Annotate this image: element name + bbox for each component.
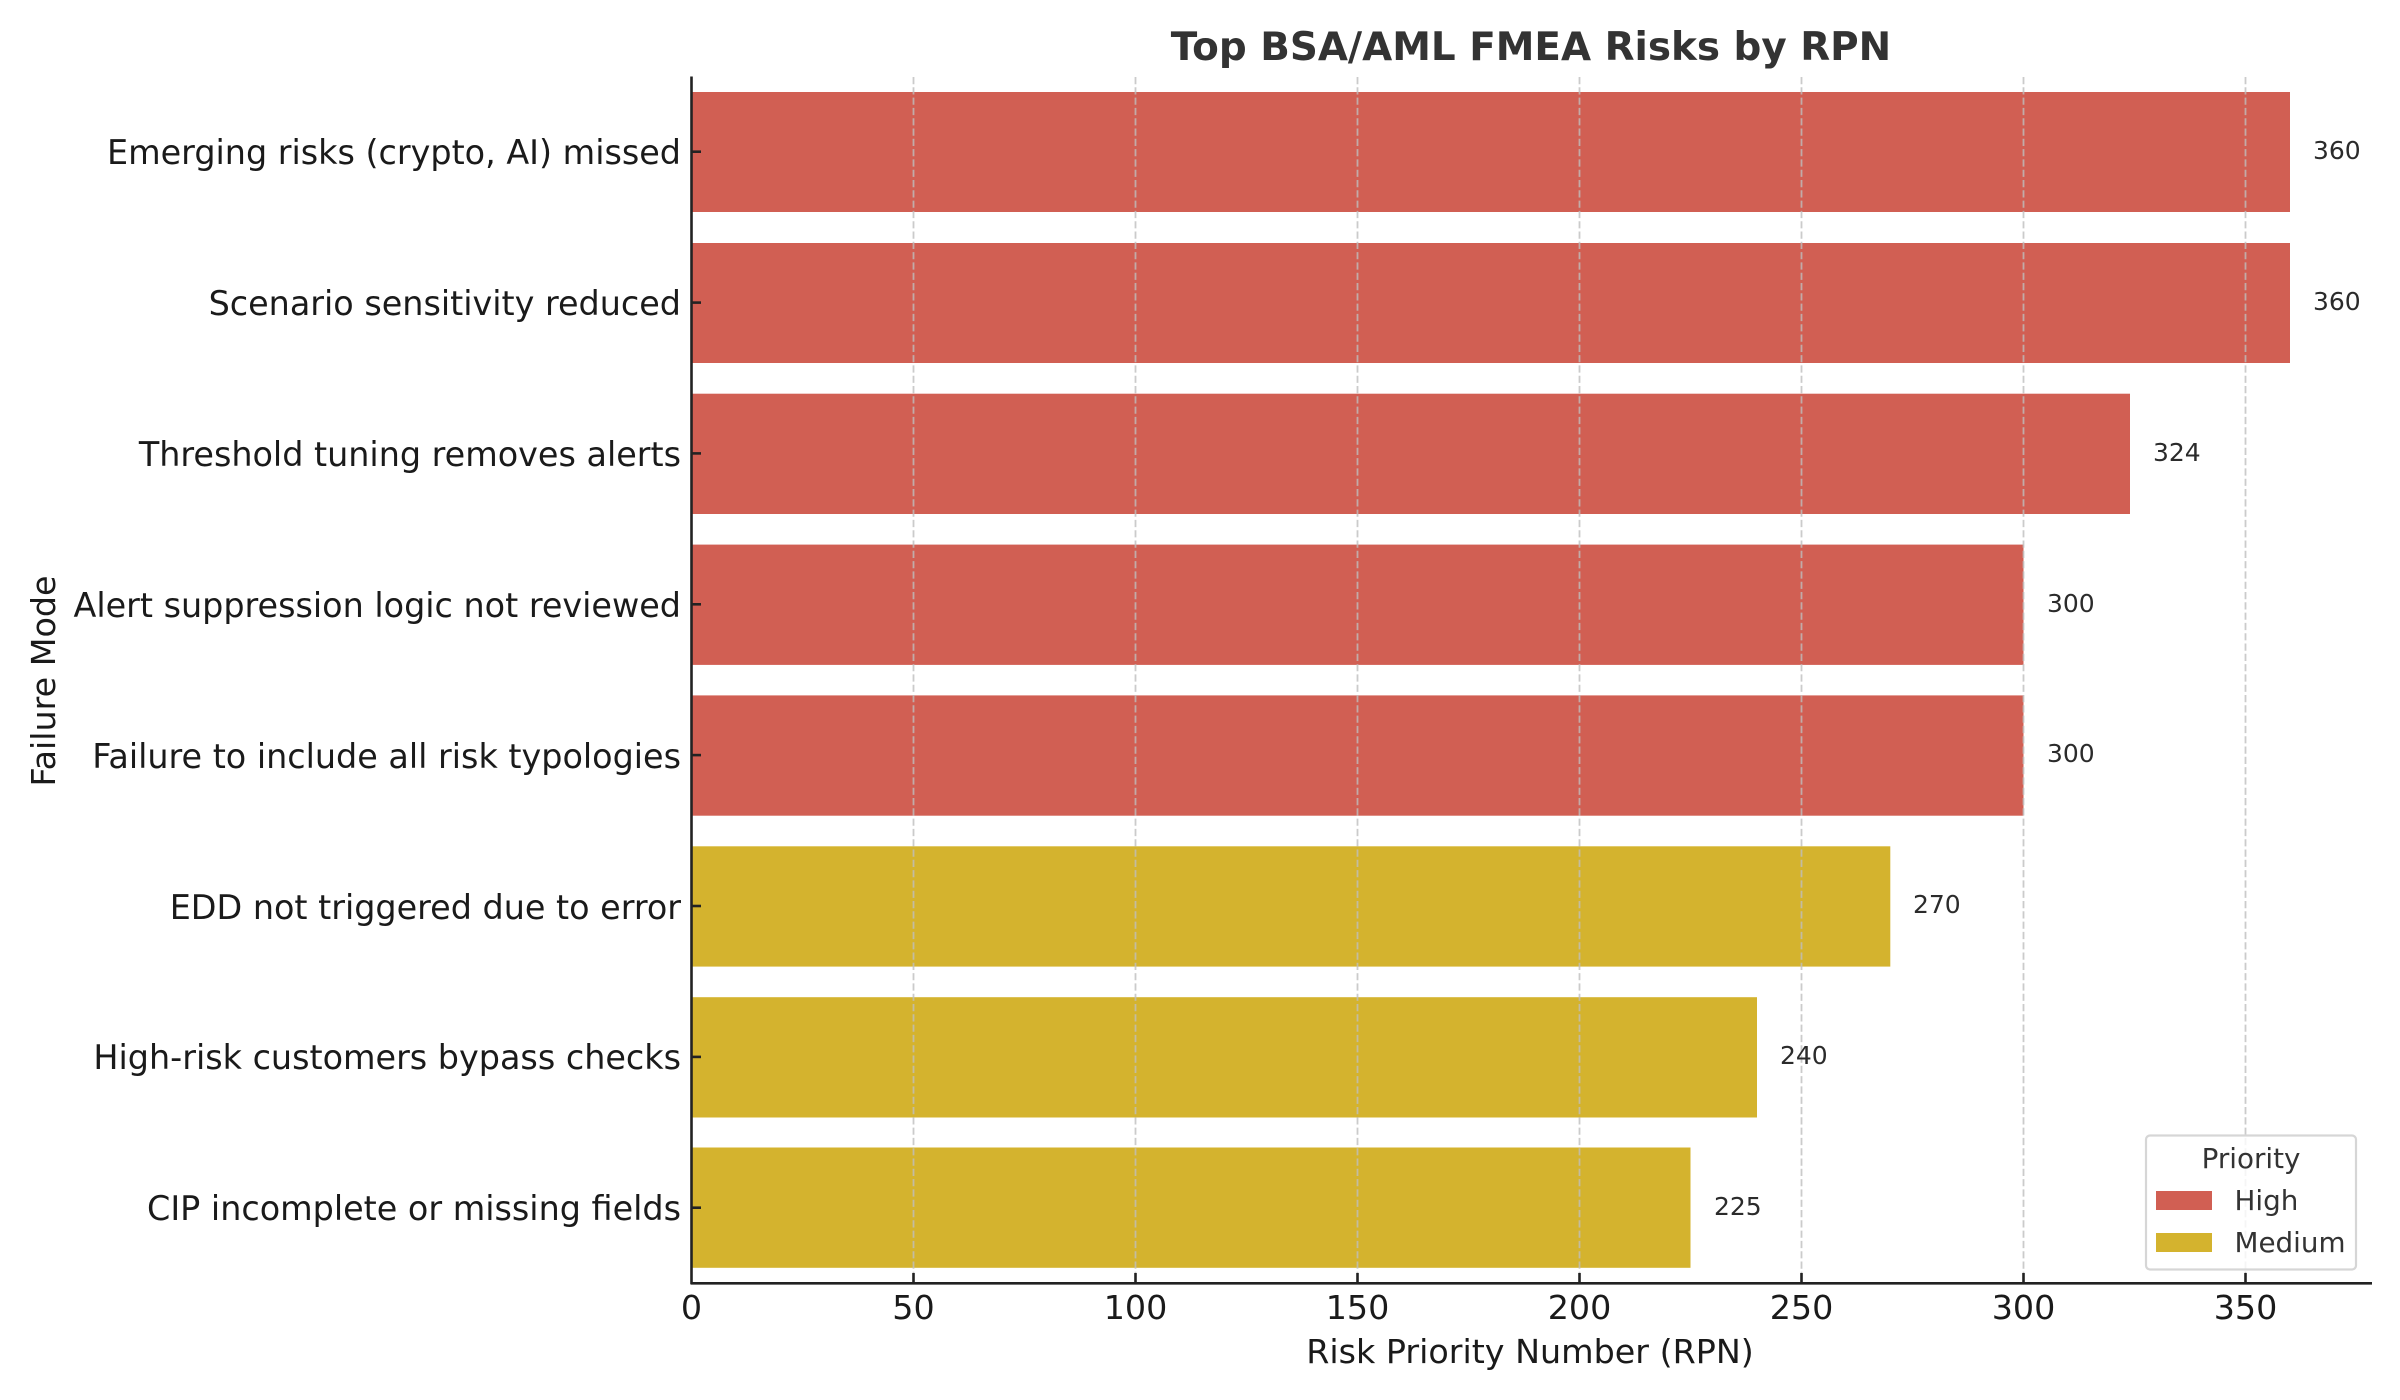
x-axis tick labels: 150 [1326, 1288, 1389, 1327]
value labels: 240 [1780, 1041, 1828, 1070]
bar: High-risk customers 240 [692, 997, 1757, 1118]
value labels: 360 [2313, 136, 2361, 165]
value labels: 300 [2047, 739, 2095, 768]
value labels: 360 [2313, 287, 2361, 316]
legend entry: High [2156, 1184, 2298, 1217]
x-axis tick labels: 50 [892, 1288, 935, 1327]
x-axis tick labels: 200 [1548, 1288, 1611, 1327]
x-axis title: Risk Priority Number (RPN) [1306, 1332, 1754, 1371]
y-axis category labels: Emerging risks (crypto, AI) missed [107, 133, 681, 172]
x-axis tick labels [681, 1288, 2277, 1327]
x-axis tick labels: 100 [1104, 1288, 1167, 1327]
y-axis category labels: High-risk customers bypass checks [93, 1038, 681, 1077]
y-axis category labels [74, 133, 681, 1228]
bar: Scenario sensitivity 360 [692, 243, 2290, 363]
x-axis tick labels: 250 [1770, 1288, 1833, 1327]
x-axis tick labels: 300 [1992, 1288, 2055, 1327]
legend entry: High: High [2234, 1184, 2298, 1217]
value labels: 270 [1913, 890, 1961, 919]
bar: Threshold tuning 324 [692, 394, 2130, 514]
y-axis category labels: EDD not triggered due to error [170, 888, 681, 927]
title: Top BSA/AML FMEA Risks by RPN [1171, 25, 1891, 70]
y-axis category labels: Alert suppression logic not reviewed [74, 586, 681, 625]
y-axis category labels: Threshold tuning removes alerts [138, 435, 681, 474]
bar: EDD not triggered 270 [692, 846, 1890, 967]
legend [2146, 1136, 2356, 1270]
value labels: 324 [2153, 438, 2201, 467]
value labels: 225 [1714, 1192, 1762, 1221]
legend title: Priority [2202, 1142, 2300, 1175]
x-axis tick labels: 0 [681, 1288, 702, 1327]
bar: Alert suppression 300 [692, 545, 2024, 665]
x-axis tick labels: 350 [2214, 1288, 2277, 1327]
bars [692, 92, 2290, 1268]
legend entry: Medium [2156, 1226, 2346, 1259]
y-axis category labels: CIP incomplete or missing fields [147, 1189, 681, 1228]
y-axis category labels: Failure to include all risk typologies [92, 737, 681, 776]
y-axis category labels: Scenario sensitivity reduced [209, 284, 681, 323]
legend entry: Medium: Medium [2234, 1226, 2346, 1259]
bar: CIP incomplete 225 [692, 1148, 1690, 1268]
y-axis title: Failure Mode [24, 575, 63, 787]
value labels [1714, 136, 2361, 1221]
bar: Emerging risks 360 [692, 92, 2290, 212]
bar: Failure to include typologies 300 [692, 695, 2024, 816]
value labels: 300 [2047, 589, 2095, 618]
